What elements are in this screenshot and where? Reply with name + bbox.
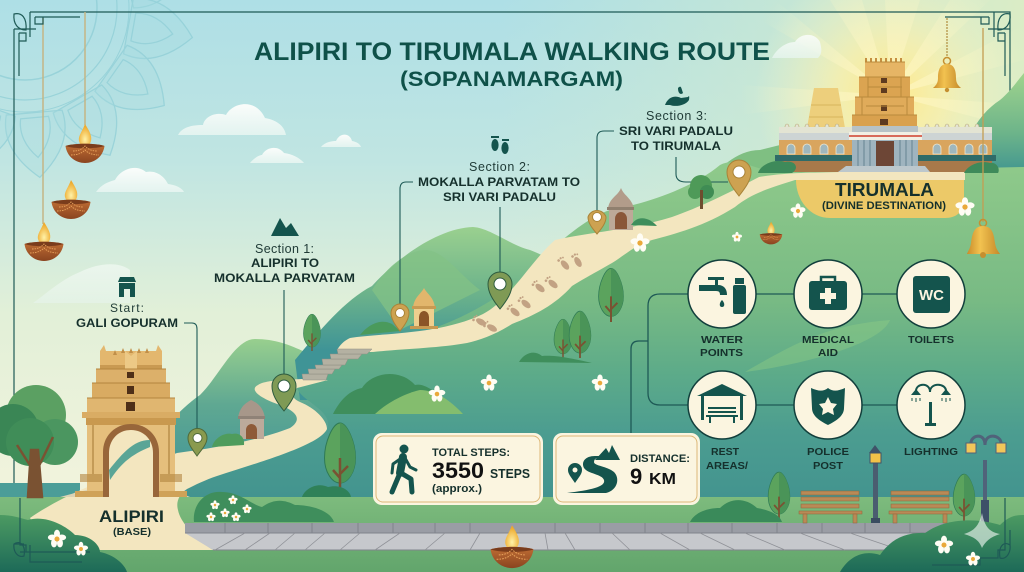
gate shadow [60, 489, 190, 497]
trees [0, 175, 975, 521]
compound wall [775, 124, 996, 172]
section 2 label [418, 136, 580, 204]
destination label: Tirumala: TIRUMALA [835, 180, 934, 200]
facility: lighting [897, 371, 965, 458]
foreground corner bushes [0, 515, 1024, 572]
icon: small gopuram [118, 277, 136, 297]
facility: toilets: TOILETS [908, 334, 954, 346]
pin: section 3 [727, 160, 751, 196]
stairs [302, 349, 372, 380]
stat card: total steps: STEPS [490, 466, 530, 481]
leader lines [184, 131, 728, 430]
left pale gopuram [807, 88, 845, 128]
facility: water points: WATER [701, 334, 743, 346]
stat card: distance: KM [649, 471, 676, 488]
pin: Sri Vari Padalu [588, 211, 606, 234]
section 3 label: TO TIRUMALA [631, 139, 721, 153]
hills [0, 73, 1024, 500]
pavement [185, 523, 990, 550]
section 3 label: Section 3: [646, 109, 707, 123]
shrines [238, 188, 634, 439]
hanging diya lamps [24, 124, 104, 261]
section 2 label: SRI VARI PADALU [443, 190, 556, 204]
stat card: total steps [373, 433, 543, 505]
icon: shelter with bench [697, 384, 747, 423]
central entrance [838, 126, 930, 172]
section 2 label: MOKALLA PARVATAM TO [418, 175, 580, 189]
section 3 label [619, 87, 733, 153]
temple complex [758, 58, 999, 173]
facility: water points [688, 260, 756, 359]
bushes [194, 218, 782, 522]
benches [799, 491, 952, 523]
stat card: distance: 9 [630, 464, 642, 489]
facility: police post [794, 371, 862, 472]
icon: footprints [491, 136, 509, 154]
shrine: golden mid [410, 288, 438, 329]
bottom centre diya [491, 525, 533, 568]
title: (SOPANAMARGAM) [400, 68, 623, 91]
temple side bushes [758, 161, 999, 173]
start label [76, 277, 178, 330]
section 1 label: ALIPIRI TO [251, 256, 319, 270]
main gopuram [852, 58, 917, 127]
hanging bells [933, 18, 1000, 258]
icon: police shield [811, 388, 845, 425]
shrine: gray lower [238, 400, 265, 439]
facility: water points: POINTS [700, 347, 743, 359]
shrine: gray upper [607, 188, 634, 230]
title [254, 38, 770, 91]
walking path [30, 172, 965, 550]
facility: medical aid: MEDICAL [802, 334, 855, 346]
sparkle [964, 513, 1000, 548]
hanging lamp cords [43, 12, 85, 224]
base label: Alipiri gate: (BASE) [113, 527, 151, 538]
footprints on the path [471, 252, 584, 334]
section 1 label: MOKALLA PARVATAM [214, 271, 355, 285]
section 1 label [214, 218, 355, 285]
small diya near destination [760, 222, 782, 244]
facility: police post: POLICE [807, 446, 849, 458]
facilities connectors [631, 294, 897, 433]
pin: section 2 [488, 272, 512, 309]
start label: GALI GOPURAM [76, 316, 178, 330]
stat card: total steps: 3550 [432, 458, 484, 483]
pin: Gali Gopuram [188, 428, 207, 456]
section 3 label: SRI VARI PADALU [619, 124, 733, 138]
pin: Mokalla Parvatam [391, 304, 409, 331]
foreground land [0, 162, 1024, 572]
map pins [188, 160, 751, 456]
facility: medical aid [794, 260, 862, 359]
gate upper tiers [87, 345, 175, 413]
stat card: total steps: (approx.) [432, 483, 482, 495]
section 1 label: Section 1: [255, 242, 314, 256]
stat card: total steps: TOTAL STEPS: [432, 447, 510, 459]
lamp posts [869, 436, 1006, 523]
stat card: distance: DISTANCE: [630, 453, 690, 465]
icon: WC sign [913, 276, 950, 313]
icon: mountains [271, 218, 299, 236]
base label: Alipiri gate [60, 345, 190, 538]
section 2 label: Section 2: [469, 160, 530, 174]
sun rays behind temple [740, 0, 1024, 230]
facility: lighting: LIGHTING [904, 446, 958, 458]
icon: hand with offering [665, 87, 689, 106]
facility: toilets [897, 260, 965, 346]
icon: winding road with pin [567, 445, 620, 493]
facility: toilets: WC [919, 287, 944, 304]
flowers [48, 197, 980, 565]
mandala ornament [0, 0, 198, 180]
start label: Start: [110, 301, 144, 315]
icon: tap and bottle [699, 277, 746, 314]
icon: double street lamp [911, 385, 951, 426]
gate arch [75, 412, 187, 497]
facility: medical aid: AID [818, 347, 838, 359]
facility: rest areas [688, 371, 756, 472]
stat card: distance [553, 433, 700, 505]
destination label: Tirumala [796, 180, 964, 218]
title: ALIPIRI TO TIRUMALA WALKING ROUTE [254, 38, 770, 66]
icon: walker [392, 444, 416, 492]
facility: police post: POST [813, 460, 844, 472]
facility: rest areas: REST [711, 446, 740, 458]
pin: section 1 [272, 374, 296, 411]
icon: first-aid kit [809, 277, 847, 310]
destination label: Tirumala: (DIVINE DESTINATION) [822, 200, 946, 212]
clouds [33, 35, 821, 303]
base label: Alipiri gate: ALIPIRI [99, 507, 164, 526]
facility: rest areas: AREAS/ [706, 460, 748, 472]
